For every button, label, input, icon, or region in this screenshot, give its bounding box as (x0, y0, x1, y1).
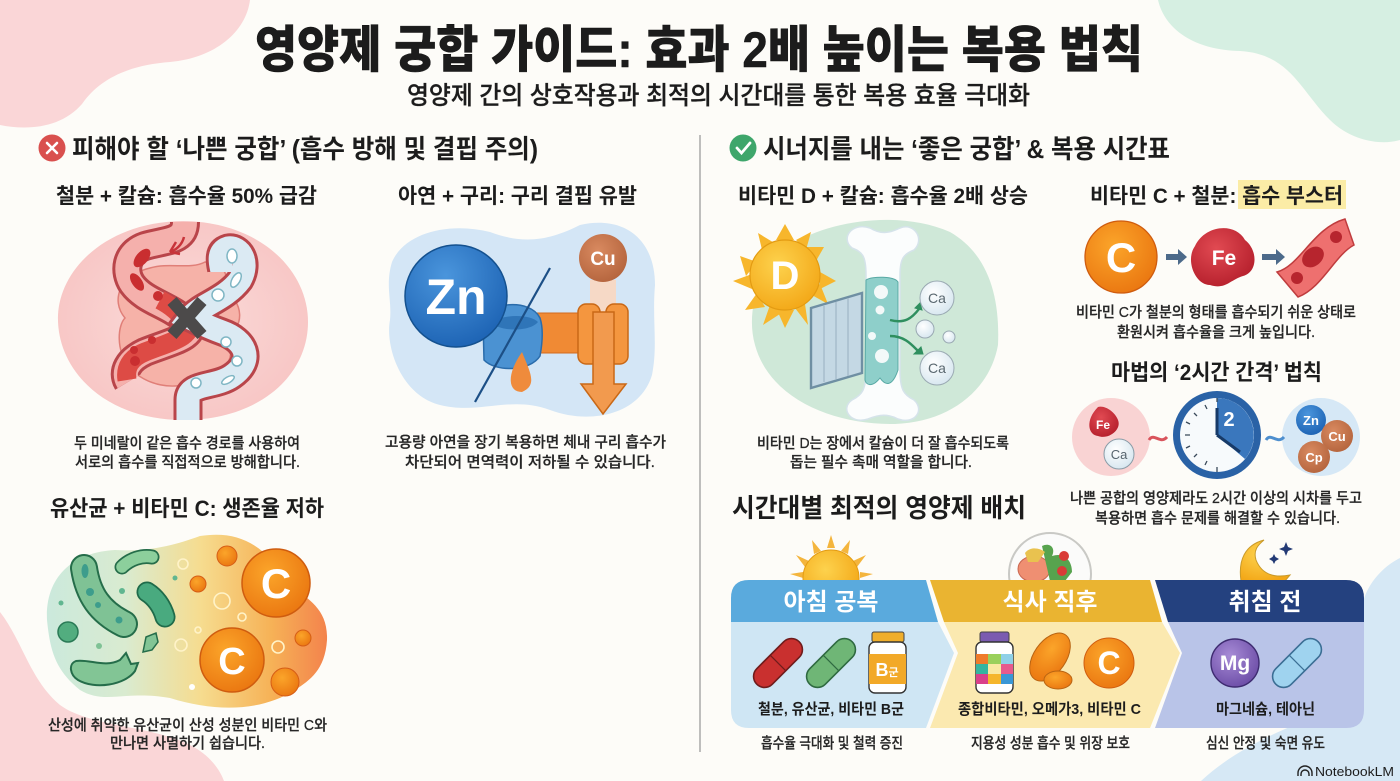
heading: schedule: 시간대별 최적의 영양제 배치 (732, 493, 1026, 523)
icon: morning sun (790, 535, 873, 580)
card: vitamin D + calcium (733, 185, 1028, 471)
section: schedule by time of day (731, 493, 1364, 752)
icon: clock between minerals: Cp (1305, 450, 1323, 465)
card: vitamin D + calcium: 비타민 D + 칼슘: 흡수율 2배 상승 (738, 185, 1028, 208)
icon: clock between minerals: Zn (1303, 413, 1319, 428)
text: iron + calcium explanation: 서로의 흡수를 직접적으로 방해합니다. (75, 454, 300, 471)
icon: clock between minerals (1072, 391, 1360, 479)
text: iron + calcium explanation: 두 미네랄이 같은 흡수 경로를 사용하여 (74, 435, 300, 452)
chevron band: morning: 아침 공복 (784, 589, 878, 616)
icon: morning pills (749, 632, 906, 693)
background blob: top right (1158, 0, 1400, 142)
chevron band: bedtime: 취침 전 (1229, 589, 1301, 616)
text: two hour rule explanation (1070, 490, 1362, 527)
card: two hour rule (1070, 360, 1362, 527)
card: iron + calcium: 철분 + 칼슘: 흡수율 50% 급감 (56, 185, 317, 208)
icon: sun, bone and calcium: Ca (928, 290, 946, 306)
text: vitamin D explanation: 비타민 D는 장에서 칼슘이 더 잘 흡수되도록 (757, 435, 1009, 452)
card: two hour rule: 마법의 ‘2시간 간격’ 법칙 (1111, 360, 1322, 385)
text: two hour rule explanation: 나쁜 공합의 영양제라도 2시간 이상의 시차를 두고 (1070, 490, 1362, 507)
icon: clock between minerals: Fe (1096, 418, 1110, 432)
text: vitamin D explanation (757, 435, 1009, 471)
card: probiotics + vitamin C: 유산균 + 비타민 C: 생존율 저하 (50, 496, 324, 521)
panel: bad combinations (38, 134, 666, 752)
text: probiotics explanation: 산성에 취약한 유산균이 산성 성분인 비타민 C와 (48, 717, 327, 734)
icon: meal supplements: C (1097, 645, 1121, 681)
icon: zinc blocks copper: Zn (425, 269, 487, 325)
chevron band: morning: 철분, 유산균, 비타민 B군 (758, 701, 904, 718)
text: iron + calcium explanation (74, 435, 300, 471)
icon: intestine blocked (58, 221, 308, 420)
text: zinc + copper explanation: 차단되어 면역력이 저하될 수 있습니다. (405, 454, 655, 471)
panel: good combinations and schedule (730, 134, 1364, 752)
heading: bad combinations: 피해야 할 ‘나쁜 궁합’ (흡수 방해 및 결핍 주의) (72, 134, 538, 164)
icon: zinc blocks copper (389, 223, 655, 417)
icon: bedtime supplements: Mg (1220, 652, 1250, 675)
text: vitamin D explanation: 돕는 필수 촉매 역할을 합니다. (790, 454, 972, 471)
icon: sun, bone and calcium: D (771, 254, 799, 298)
text: probiotics explanation: 만나면 사멸하기 쉽습니다. (110, 735, 265, 752)
card: vitamin C + iron: 비타민 C + 철분: 흡수 부스터 (1090, 185, 1343, 208)
heading: good combinations: 시너지를 내는 ‘좋은 궁합’ & 복용 시간표 (763, 134, 1170, 164)
background blob: bottom right (1201, 558, 1400, 781)
icon: meal plate (1008, 532, 1092, 580)
text: two hour rule explanation: 복용하면 흡수 문제를 해결할 수 있습니다. (1095, 510, 1340, 527)
icon: bacteria destroyed by vitamin C: C (218, 641, 246, 683)
title: 영양제 궁합 가이드: 효과 2배 높이는 복용 법칙 (255, 22, 1143, 78)
text: vitamin C explanation (1076, 304, 1356, 341)
background blob: bottom left (0, 612, 224, 781)
chevron band: after meal: 식사 직후 (1002, 589, 1098, 616)
schedule captions: 지용성 성분 흡수 및 위장 보호 (971, 735, 1130, 752)
chevron band: morning (731, 580, 954, 728)
schedule captions (761, 735, 1325, 752)
icon: morning pills: B군 (875, 660, 899, 680)
icon: bacteria destroyed by vitamin C: C (261, 560, 291, 607)
icon: vitamin C to iron to blood vessel (1085, 219, 1354, 297)
subtitle: 영양제 간의 상호작용과 최적의 시간대를 통한 복용 효율 극대화 (407, 82, 1030, 110)
icon: bacteria destroyed by vitamin C (47, 535, 327, 708)
watermark: NotebookLM: NotebookLM (1315, 764, 1394, 779)
chevron band: after meal (930, 580, 1180, 728)
icon: night moon (1240, 540, 1293, 581)
icon: clock between minerals: Ca (1111, 447, 1128, 462)
chevron band: bedtime (1155, 580, 1364, 728)
text: vitamin C explanation: 비타민 C가 철분의 형태를 흡수되기 쉬운 상태로 (1076, 304, 1356, 321)
text: zinc + copper explanation (385, 434, 666, 471)
icon: meal supplements (976, 626, 1134, 693)
text: zinc + copper explanation: 고용량 아연을 장기 복용하면 체내 구리 흡수가 (385, 434, 666, 451)
background blob: top left (0, 0, 250, 127)
icon: bedtime supplements (1211, 634, 1326, 692)
card: vitamin C + iron (1076, 180, 1356, 341)
schedule captions: 심신 안정 및 숙면 유도 (1206, 735, 1325, 752)
icon: vitamin C to iron to blood vessel: C (1106, 234, 1136, 281)
icon: vitamin C to iron to blood vessel: Fe (1212, 247, 1236, 270)
card: zinc + copper (385, 185, 666, 471)
card: iron + calcium (56, 185, 317, 471)
icon: zinc blocks copper: Cu (590, 249, 616, 270)
text: vitamin C explanation: 환원시켜 흡수율을 크게 높입니다. (1117, 324, 1315, 341)
text: probiotics explanation (48, 717, 327, 752)
card: probiotics + vitamin C (47, 496, 327, 752)
card: zinc + copper: 아연 + 구리: 구리 결핍 유발 (398, 185, 637, 208)
chevron band: bedtime: 마그네슘, 테아닌 (1216, 701, 1315, 718)
chevron band: after meal: 종합비타민, 오메가3, 비타민 C (958, 701, 1141, 718)
icon: clock between minerals: 2 (1223, 409, 1235, 431)
icon: sun, bone and calcium: Ca (928, 360, 946, 376)
icon: clock between minerals: Cu (1328, 429, 1346, 444)
icon: sun, bone and calcium (733, 220, 998, 424)
schedule captions: 흡수율 극대화 및 철력 증진 (761, 735, 903, 752)
